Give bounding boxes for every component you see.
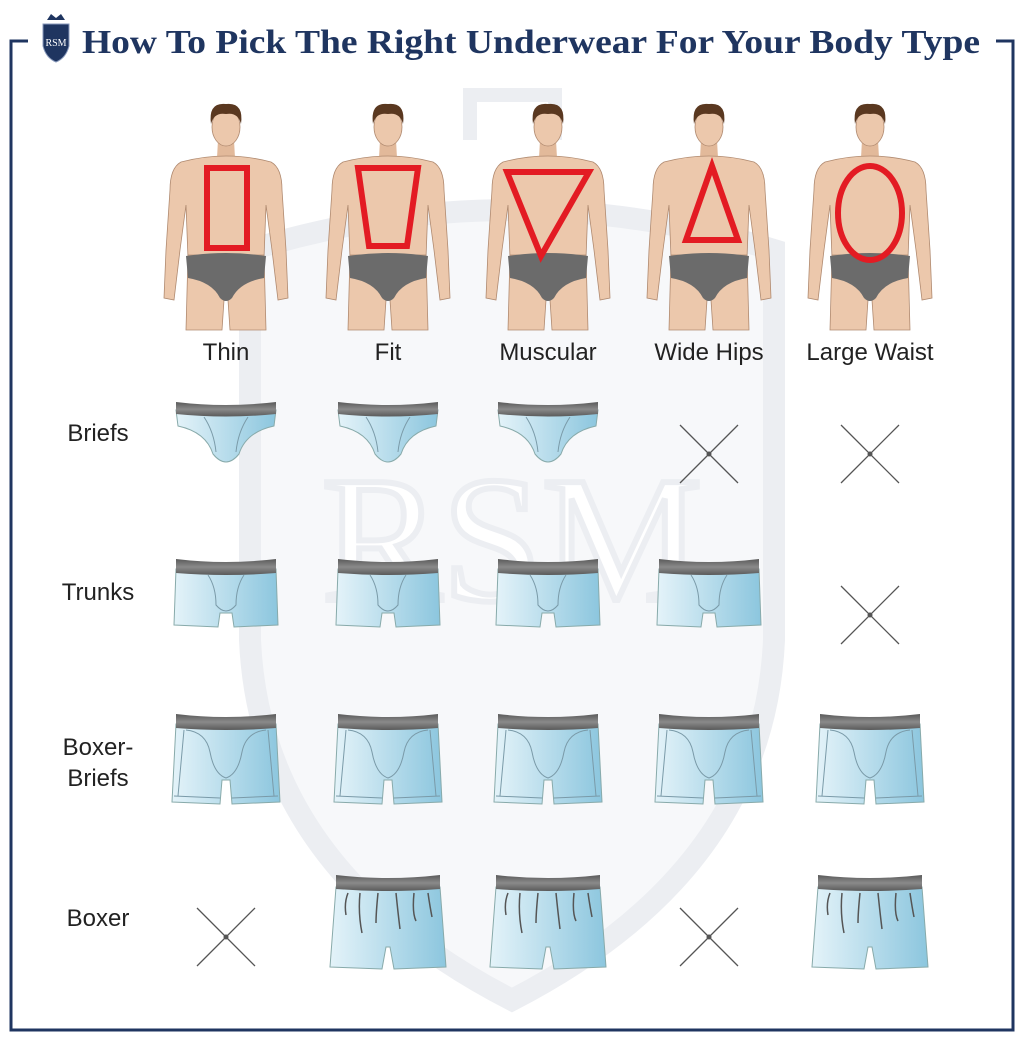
row labels: Boxer- bbox=[63, 734, 133, 761]
row labels: Briefs bbox=[67, 765, 129, 792]
row labels: Boxer bbox=[67, 905, 129, 932]
row labels bbox=[62, 420, 134, 932]
row: trunks bbox=[174, 559, 899, 644]
row labels: Trunks bbox=[62, 579, 134, 606]
figure: thin bbox=[164, 104, 288, 330]
watermark shield bbox=[250, 95, 774, 1000]
figure: muscular bbox=[486, 104, 610, 330]
title: How To Pick The Right Underwear For Your Body Type bbox=[82, 24, 980, 61]
figure: large waist bbox=[808, 104, 932, 330]
watermark shield: RSM bbox=[322, 440, 702, 639]
row: briefs bbox=[176, 402, 899, 483]
column labels: Large Waist bbox=[806, 339, 934, 366]
row labels: Briefs bbox=[67, 420, 129, 447]
column labels: Wide Hips bbox=[654, 339, 764, 366]
icon: shield logo: RSM bbox=[45, 38, 67, 49]
figure: fit bbox=[326, 104, 450, 330]
column labels: Fit bbox=[375, 339, 402, 366]
row: boxer bbox=[197, 875, 928, 969]
figure: wide hips bbox=[647, 104, 771, 330]
column labels: Thin bbox=[203, 339, 249, 366]
column labels bbox=[203, 339, 934, 366]
icon: shield logo bbox=[43, 14, 69, 62]
row: boxer-briefs bbox=[172, 714, 924, 804]
column labels: Muscular bbox=[499, 339, 597, 366]
title bbox=[43, 14, 980, 62]
